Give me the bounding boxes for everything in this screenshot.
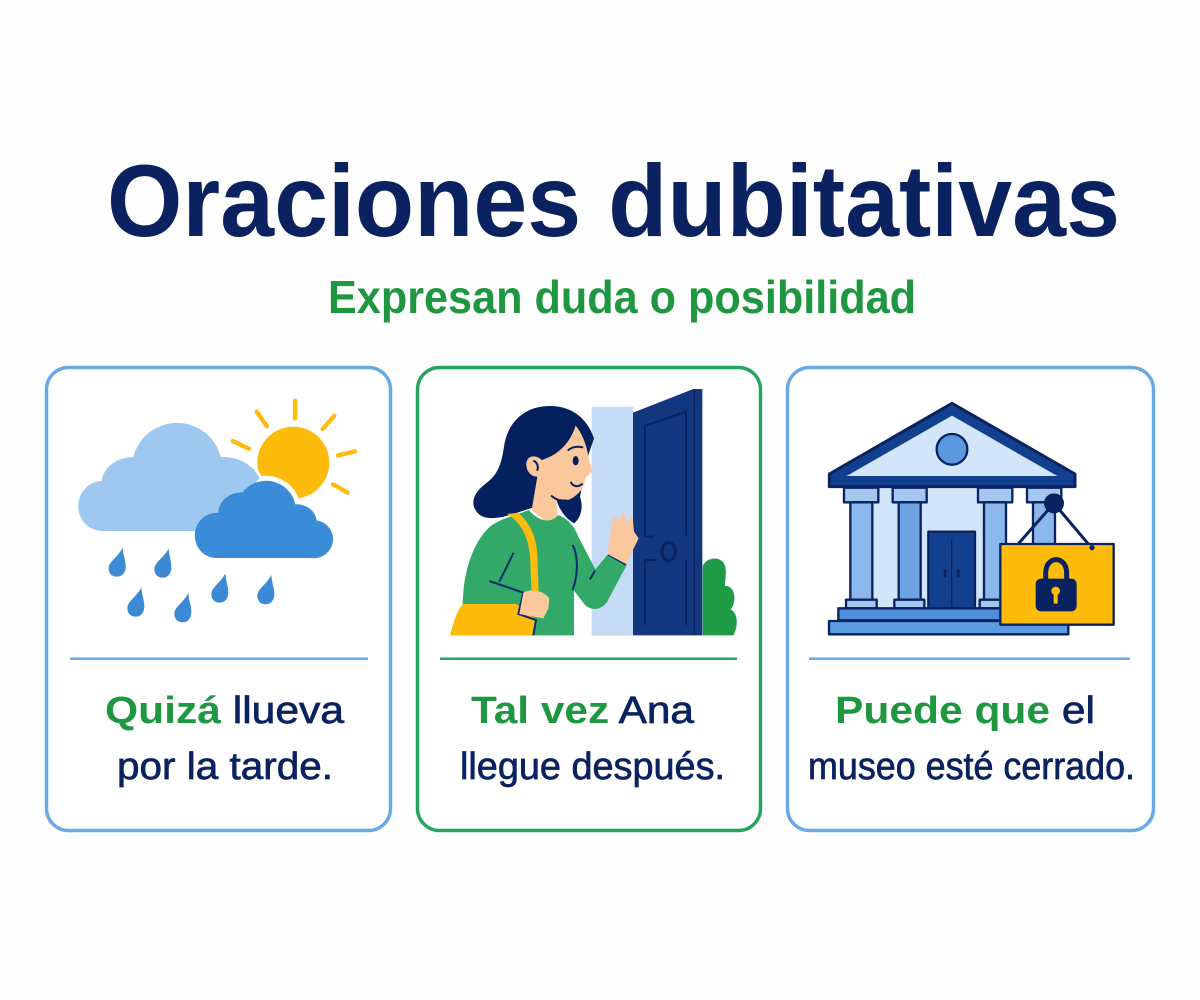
caption: door: llegue después. (460, 746, 725, 788)
panel: door (418, 368, 760, 830)
icon: cloud, sun and rain (78, 401, 355, 622)
icon: woman at door (450, 389, 737, 636)
panel: museum (788, 368, 1154, 830)
caption: museum: museo esté cerrado. (808, 746, 1135, 788)
panel: weather (46, 368, 390, 830)
caption: museum (808, 690, 1135, 788)
caption: museum: Puede que el (835, 690, 1095, 732)
title: Oraciones dubitativas (107, 144, 1120, 258)
divider (440, 658, 737, 660)
caption: door: Tal vez Ana (471, 690, 695, 732)
subtitle: Expresan duda o posibilidad (328, 271, 916, 323)
caption: weather (105, 690, 345, 788)
divider (809, 658, 1130, 660)
icon: closed museum (829, 403, 1114, 634)
caption: weather: por la tarde. (117, 746, 333, 788)
divider (70, 658, 368, 660)
caption: door (460, 690, 725, 788)
caption: weather: Quizá llueva (105, 690, 345, 732)
